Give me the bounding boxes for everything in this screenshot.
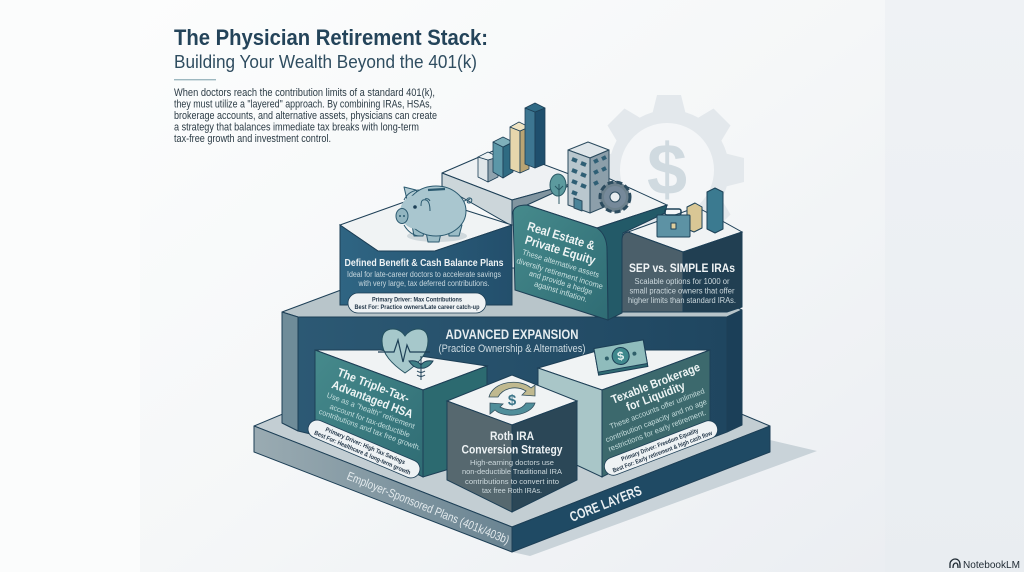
accent rule [174, 79, 216, 80]
icon: background gear with dollar [594, 95, 744, 245]
card description [628, 277, 736, 305]
NotebookLM watermark [950, 559, 1020, 571]
intro paragraph: When doctors reach the contribution limits of a standard 401(k), [174, 87, 435, 99]
card description: tax free Roth IRAs. [482, 486, 542, 495]
card description [318, 391, 422, 452]
icon: dollar bill [594, 340, 648, 375]
step left face [442, 173, 512, 226]
card description: contributions and tax free growth. [318, 407, 422, 452]
pill: primary driver: Best For: Early retirement & high cash flow [612, 430, 713, 474]
card title [330, 365, 415, 421]
card description: restrictions for early retirement. [607, 408, 707, 454]
card right face [597, 205, 667, 320]
card description: higher limits than standard IRAs. [628, 296, 736, 305]
panel description: Ideal for late-career doctors to accelerate savings [347, 270, 501, 279]
panel face [340, 225, 512, 305]
card description: diversify retirement income [515, 256, 604, 291]
card description: Use as a "health" retirement [326, 391, 417, 431]
card description: small practice owners that offer [630, 286, 735, 296]
card title: Texable Brokerage [609, 360, 702, 407]
label: core layers: CORE LAYERS [567, 482, 644, 525]
step right face [512, 180, 585, 214]
card title: Private Equity [523, 233, 597, 268]
panel: taxable brokerage for liquidity [538, 340, 720, 478]
icon: NotebookLM logo [950, 559, 960, 568]
card top surface [628, 207, 742, 252]
card top surface [447, 375, 577, 425]
pill: primary driver: Best For: Practice owners/Late career catch-up [354, 304, 480, 311]
card left face [622, 232, 683, 312]
card left face [538, 368, 602, 477]
panel top surface [340, 196, 512, 251]
label: employer-sponsored plans: Employer-Sponsored Plans (401k/403b) [345, 469, 511, 547]
central background panel [140, 0, 885, 572]
card title [523, 219, 597, 268]
icon: dollar bill: $ [616, 349, 625, 364]
card description: contribution capacity and no age [604, 397, 708, 444]
card right face [683, 232, 742, 312]
card front face [315, 350, 423, 477]
card description: and provide a hedge [528, 269, 594, 297]
card title: Roth IRA [490, 431, 534, 443]
pill: primary driver: Primary Driver: Freedom Equality [620, 427, 700, 463]
card front face [513, 205, 608, 320]
panel: defined benefit and cash balance plans [340, 186, 512, 313]
card top surface [315, 350, 487, 390]
card title: SEP vs. SIMPLE IRAs [629, 263, 735, 275]
card description: These accounts offer unlimited [608, 386, 706, 431]
card title: Conversion Strategy [462, 444, 563, 456]
platform left face [254, 426, 512, 552]
card description: contributions to convert into [465, 477, 559, 486]
card description [515, 248, 604, 304]
pill: primary driver: Primary Driver: Max Contributions [372, 296, 462, 304]
card title [462, 431, 563, 456]
back step with bar chart [442, 103, 585, 226]
heading: The Physician Retirement Stack: [174, 25, 488, 50]
card title: The Triple-Tax- [335, 365, 411, 405]
icon: small tree [550, 174, 566, 204]
intro paragraph: brokerage accounts, and alternative assets, physicians can create [174, 110, 437, 122]
card description: Scalable options for 1000 or [634, 277, 730, 286]
intro paragraph: they must utilize a "layered" approach. By combining IRAs, HSAs, [174, 98, 432, 110]
icon: conversion arrows with dollar: $ [508, 392, 517, 409]
panel: Roth IRA conversion strategy [447, 375, 577, 512]
icon: office building [568, 142, 609, 213]
tier right column [727, 310, 742, 432]
panel description [347, 270, 501, 288]
panel: SEP vs SIMPLE IRAs [622, 188, 742, 312]
card right face [602, 350, 710, 477]
card top surface [538, 350, 710, 390]
panel description: with very large, tax deferred contributions. [358, 279, 490, 288]
pill: primary driver [348, 293, 486, 313]
subheading: practice ownership: (Practice Ownership & Alternatives) [438, 343, 586, 355]
platform shadow [512, 440, 817, 556]
card right face [512, 401, 577, 512]
icon: heart with pulse and caduceus [378, 329, 433, 380]
card top surface [527, 173, 667, 228]
card description: non-deductible Traditional IRA [462, 467, 563, 476]
icon: background gear with dollar: $ [647, 130, 687, 210]
platform top [254, 318, 770, 527]
panel: real estate and private equity [513, 142, 667, 320]
right background band [885, 0, 1024, 572]
platform right face [512, 426, 770, 552]
intro paragraph: tax-free growth and investment control. [174, 133, 331, 145]
pill: primary driver: Best For: Healthcare & long-term growth [313, 430, 412, 477]
bar chart icon [478, 103, 545, 182]
panel title: Defined Benefit & Cash Balance Plans [344, 257, 504, 269]
base platform: core layers [254, 318, 817, 556]
middle tier: advanced expansion [282, 268, 742, 465]
card right face [423, 366, 487, 477]
heading: advanced expansion: ADVANCED EXPANSION [446, 327, 578, 342]
card left face [447, 401, 512, 512]
card description [462, 458, 563, 495]
card description: High-earning doctors use [470, 458, 554, 467]
icon: small gear [600, 182, 630, 212]
tier left face [282, 312, 298, 431]
intro paragraph [174, 87, 437, 145]
icon: piggy bank [396, 186, 472, 242]
card description: account for tax-deductible [328, 402, 411, 439]
card description: These alternative assets [521, 248, 600, 280]
panel: triple-tax-advantaged HSA [305, 329, 487, 481]
card title: for Liquidity [624, 379, 687, 414]
intro paragraph: a strategy that balances immediate tax breaks with long-term [174, 122, 419, 134]
card description: against inflation. [533, 279, 588, 304]
subheading: Building Your Wealth Beyond the 401(k) [174, 51, 477, 72]
icon: briefcase and bars [657, 188, 723, 237]
tier top surface [282, 268, 742, 317]
wordmark: NotebookLM [963, 560, 1020, 571]
pill: primary driver: Primary Driver: High Tax Savings [324, 426, 407, 466]
card title: Real Estate & [526, 219, 597, 253]
tier front wall [298, 317, 727, 465]
title block [174, 25, 488, 145]
step top [442, 148, 585, 200]
card title: Advantaged HSA [330, 377, 415, 421]
